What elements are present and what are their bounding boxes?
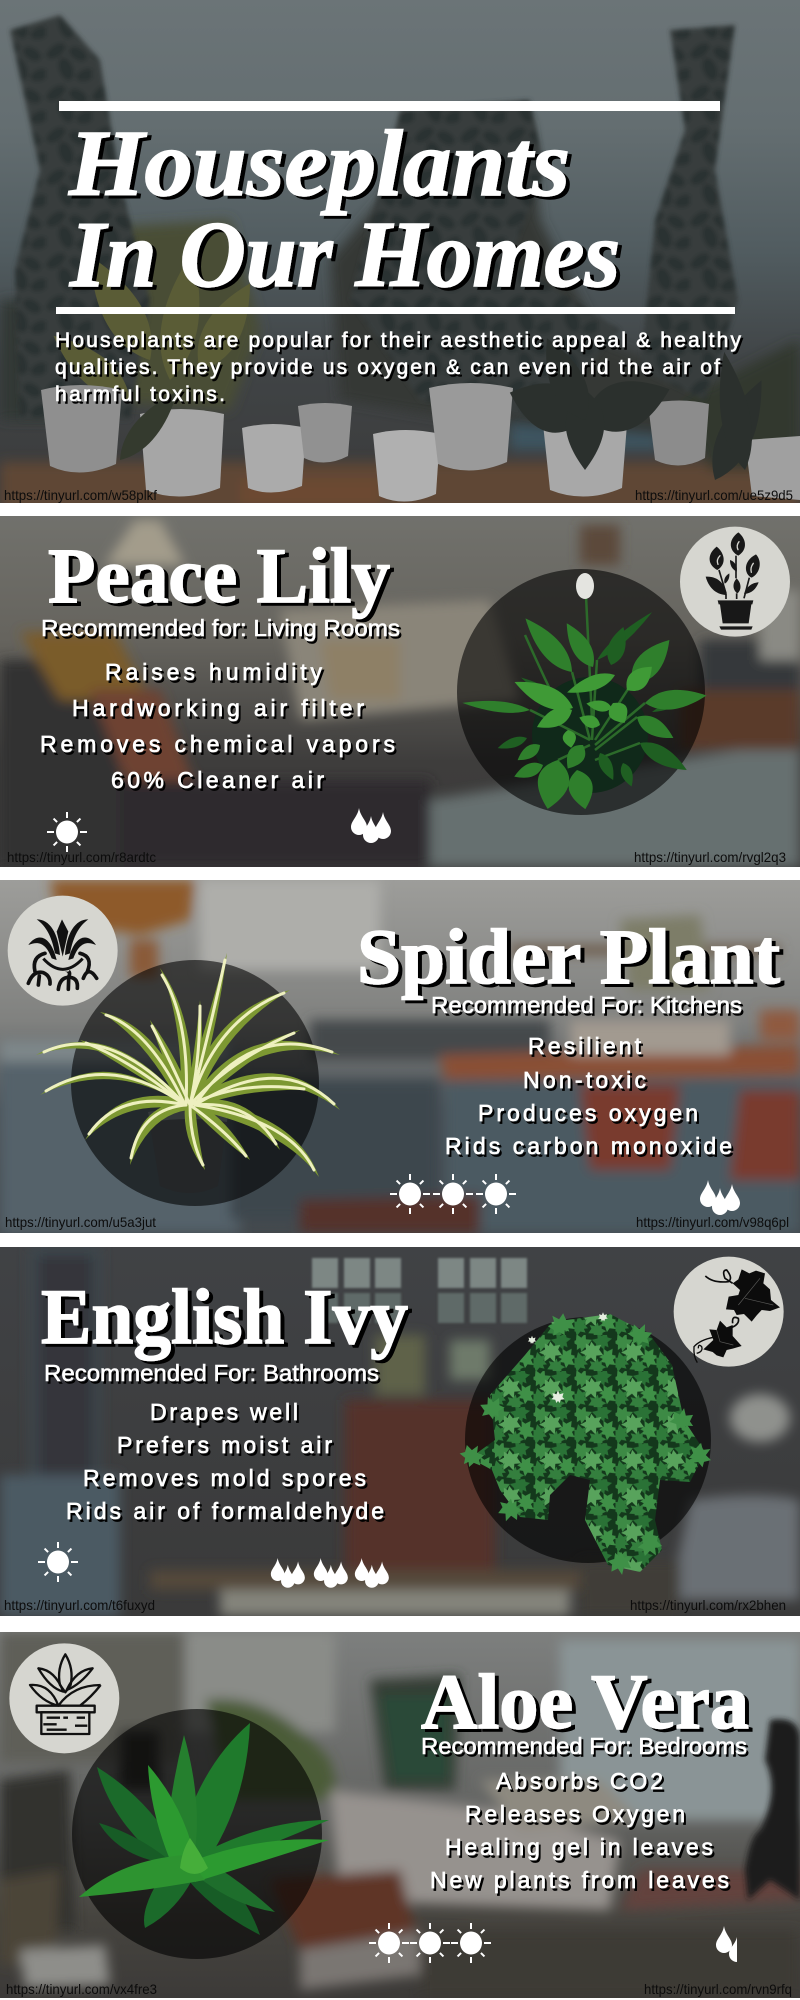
recommended room: Recommended for: Living Rooms: [41, 615, 400, 641]
source links: header: https://tinyurl.com/w58plkf: [4, 487, 157, 503]
benefits list: Releases Oxygen: [465, 1801, 685, 1827]
panel: aloe vera: [0, 1632, 800, 1998]
intro text: Houseplants are popular for their aesthetic appeal & healthy: [55, 329, 741, 352]
dark circle: [465, 1317, 711, 1563]
dark circle: [72, 1709, 322, 1959]
plant: aloe vera: [79, 1723, 329, 1935]
dark circle: [457, 569, 705, 815]
title: Peace Lily: Peace Lily: [48, 532, 390, 619]
source links: peace lily: https://tinyurl.com/rvgl2q3: [634, 849, 786, 865]
plant: spider plant: [36, 953, 340, 1193]
icons: three suns: [390, 1174, 516, 1214]
recommended room: Recommended For: Bedrooms: [421, 1733, 747, 1759]
source links: header: [4, 487, 793, 503]
benefits list: Rids air of formaldehyde: [66, 1498, 384, 1524]
benefits list: Removes chemical vapors: [40, 731, 395, 757]
source links: aloe vera: https://tinyurl.com/vx4fre3: [6, 1981, 157, 1997]
icon: ivy leaves: [674, 1257, 784, 1367]
top rule: [59, 101, 720, 111]
source links: peace lily: https://tinyurl.com/r8ardtc: [7, 849, 156, 865]
title: Houseplants: [68, 112, 570, 216]
panel: english ivy: [0, 1247, 800, 1616]
title: Spider Plant: Spider Plant: [357, 913, 780, 1000]
plant: peace lily: [462, 573, 708, 812]
benefits list: [430, 1768, 729, 1893]
benefits list: [445, 1033, 732, 1159]
title: [68, 112, 620, 307]
icons: water drops: [271, 1558, 389, 1588]
panel: peace lily: [0, 516, 800, 867]
source links: peace lily: [7, 849, 786, 865]
foliage over pots: [111, 331, 777, 487]
foliage silhouettes: [10, 15, 738, 420]
icon: spider plant: [8, 896, 118, 1006]
benefits list: Healing gel in leaves: [445, 1834, 713, 1860]
benefits list: New plants from leaves: [430, 1867, 729, 1893]
benefits list: [40, 659, 395, 793]
source links: spider plant: https://tinyurl.com/u5a3jut: [5, 1214, 156, 1230]
intro text: qualities. They provide us oxygen & can even rid the air of: [55, 356, 720, 379]
dark circle: [71, 960, 319, 1206]
recommended room: Recommended For: Kitchens: [431, 992, 742, 1018]
benefits list: Resilient: [528, 1033, 642, 1059]
source links: aloe vera: [6, 1981, 792, 1997]
panel: spider plant: [0, 880, 800, 1233]
bottom rule: [56, 307, 735, 314]
benefits list: Non-toxic: [523, 1067, 646, 1093]
benefits list: Hardworking air filter: [72, 695, 364, 721]
title: English Ivy: English Ivy: [41, 1273, 408, 1360]
recommended room: Recommended For: Bathrooms: [44, 1360, 379, 1386]
benefits list: Removes mold spores: [83, 1465, 366, 1491]
source links: english ivy: https://tinyurl.com/t6fuxyd: [4, 1597, 155, 1613]
intro text: harmful toxins.: [55, 383, 225, 406]
icon: peace lily in pot: [680, 527, 790, 637]
source links: spider plant: https://tinyurl.com/v98q6pl: [636, 1214, 789, 1230]
source links: spider plant: [5, 1214, 789, 1230]
icon: aloe in pot: [9, 1643, 119, 1753]
benefits list: Absorbs CO2: [496, 1768, 663, 1794]
benefits list: Produces oxygen: [478, 1100, 698, 1126]
source links: header: https://tinyurl.com/ue5z9d5: [635, 487, 793, 503]
title: In Our Homes: [69, 203, 620, 307]
source links: english ivy: https://tinyurl.com/rx2bhen: [630, 1597, 786, 1613]
croton leaves: [54, 262, 250, 400]
pots: [41, 383, 800, 502]
benefits list: 60% Cleaner air: [111, 767, 324, 793]
cat silhouette: [745, 1719, 800, 1900]
icons: three suns: [369, 1923, 491, 1963]
benefits list: Rids carbon monoxide: [445, 1133, 732, 1159]
benefits list: Raises humidity: [105, 659, 322, 685]
source links: english ivy: [4, 1597, 786, 1613]
icon: sun: [47, 812, 87, 852]
intro text: [55, 329, 741, 406]
benefits list: Prefers moist air: [117, 1432, 332, 1458]
icon: sun: [38, 1542, 78, 1582]
benefits list: [66, 1399, 384, 1524]
icon: water drops: [716, 1926, 737, 1962]
icon: water drops: [351, 808, 391, 843]
plant: english ivy: [456, 1308, 716, 1577]
panel: header: [0, 0, 800, 512]
benefits list: Drapes well: [150, 1399, 298, 1425]
title: Aloe Vera: Aloe Vera: [421, 1658, 749, 1745]
source links: aloe vera: https://tinyurl.com/rvn9rfq: [644, 1981, 792, 1997]
icon: water drops: [700, 1180, 740, 1215]
